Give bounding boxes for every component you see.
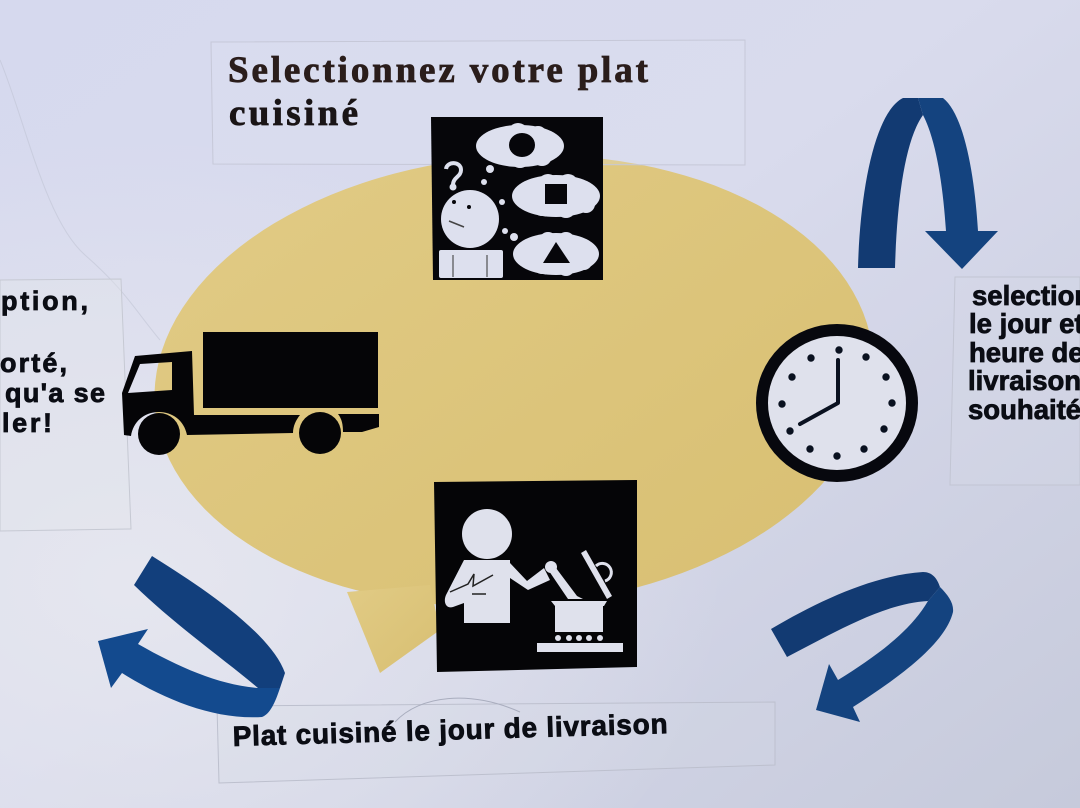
text: reception message: qu'a se (5, 378, 105, 408)
heading: select your dish: cuisiné (229, 93, 358, 134)
cloud: square option (512, 174, 600, 218)
panel: reception (0, 279, 131, 531)
text: reception message: orté, (0, 348, 67, 378)
icon: cooking person (434, 480, 637, 672)
arrow: bottom left (98, 556, 285, 717)
text: delivery day and time: livraison (968, 365, 1080, 396)
heading: select your dish: Selectionnez votre plat (228, 50, 649, 91)
question mark (446, 163, 461, 185)
text: reception message: ler! (2, 408, 52, 438)
icon: person thinking about dishes (431, 117, 603, 280)
cloud: triangle option (513, 232, 599, 276)
person (439, 190, 503, 278)
icon: clock (762, 330, 912, 476)
panel: cooked on delivery day (217, 698, 775, 783)
icon: delivery truck (122, 332, 379, 455)
text: reception message: ption, (1, 286, 88, 316)
panel: select dish (211, 40, 745, 165)
text: reception message (0, 286, 105, 438)
heading: select your dish (228, 50, 649, 134)
arrow: bottom right (771, 572, 953, 722)
arrow: top right (858, 98, 998, 269)
speech bubble background (139, 131, 889, 673)
thought bubbles (481, 165, 518, 241)
cloud: circle option (476, 123, 564, 168)
text: cooked on delivery day: Plat cuisiné le jour de livraison (232, 708, 668, 752)
panel: choose delivery time (950, 277, 1080, 485)
text: delivery day and time (968, 280, 1080, 425)
